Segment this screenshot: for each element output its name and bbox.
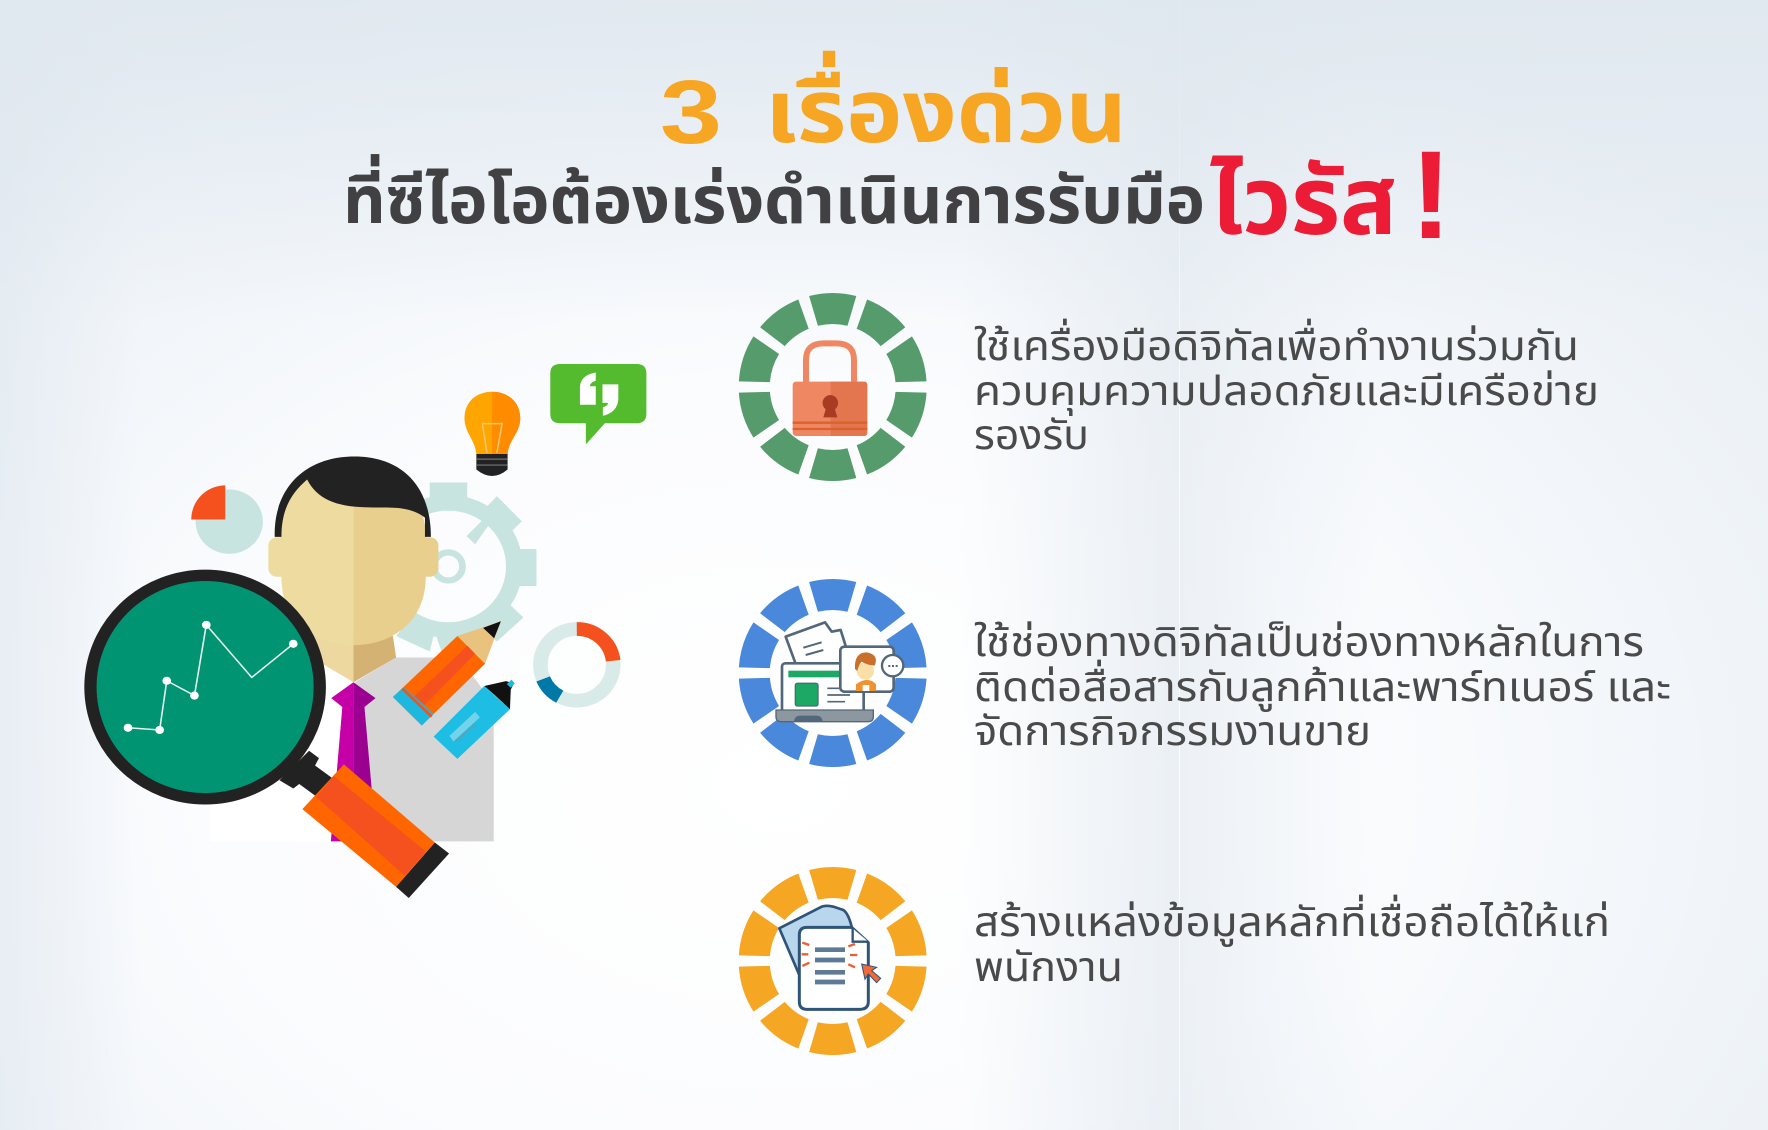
heading: number 3: 3 [660, 63, 722, 163]
exclamation mark: ! [1410, 126, 1452, 265]
icon: padlock [793, 343, 867, 436]
line chart in lens [124, 621, 298, 734]
figure: head and face [268, 464, 438, 645]
text block 1: ใช้เครื่องมือดิจิทัลเพื่อทำงานร่วมกัน [974, 318, 1579, 369]
icon: laptop with video call [776, 622, 903, 722]
ring: blue [736, 579, 929, 767]
text block 2: ใช้ช่องทางดิจิทัลเป็นช่องทางหลักในการ [974, 619, 1644, 665]
text block 1: ควบคุมความปลอดภัยและมีเครือข่าย [974, 368, 1599, 416]
text block 3 [974, 894, 1610, 990]
magnifier handle [279, 751, 449, 898]
icon: light bulb [464, 392, 520, 476]
icon: documents with pointer [779, 906, 881, 1009]
item 3: single source of truth [736, 867, 1610, 1055]
icon: speech bubble with quote [550, 364, 646, 444]
ring: orange [736, 867, 929, 1055]
icon: marker [434, 680, 515, 759]
text block 2: ติดต่อสื่อสารกับลูกค้าและพาร์ทเนอร์ และ [974, 659, 1671, 712]
item 1: digital collaboration tools [736, 293, 1599, 481]
ring: green [736, 293, 929, 481]
text block 3: พนักงาน [974, 944, 1123, 990]
text block 1 [974, 318, 1599, 458]
figure: tie [331, 682, 376, 841]
item 2: digital channels [736, 579, 1671, 767]
heading: urgent matters: เรื่องด่วน [765, 50, 1127, 161]
text block 1: รองรับ [974, 412, 1089, 458]
magnifier lens [90, 575, 320, 799]
title [343, 50, 1452, 265]
text block 2 [974, 619, 1671, 754]
icon: gear [382, 482, 536, 652]
icon: pencil [393, 621, 501, 726]
text block 3: สร้างแหล่งข้อมูลหลักที่เชื่อถือได้ให้แก่ [974, 894, 1610, 947]
icon: pie chart [191, 485, 263, 554]
icon: donut chart [540, 629, 613, 701]
subheading: ที่ซีไอโอต้องเร่งดำเนินการรับมือ [343, 154, 1205, 237]
figure: hair [275, 457, 431, 537]
figure: neck [313, 636, 396, 682]
illustration: executive with magnifier [90, 364, 646, 898]
highlighted word: virus: ไวรัส [1210, 149, 1397, 254]
text block 2: จัดการกิจกรรมงานขาย [974, 708, 1371, 754]
figure: shirt [210, 657, 494, 841]
magnifier [90, 575, 449, 898]
